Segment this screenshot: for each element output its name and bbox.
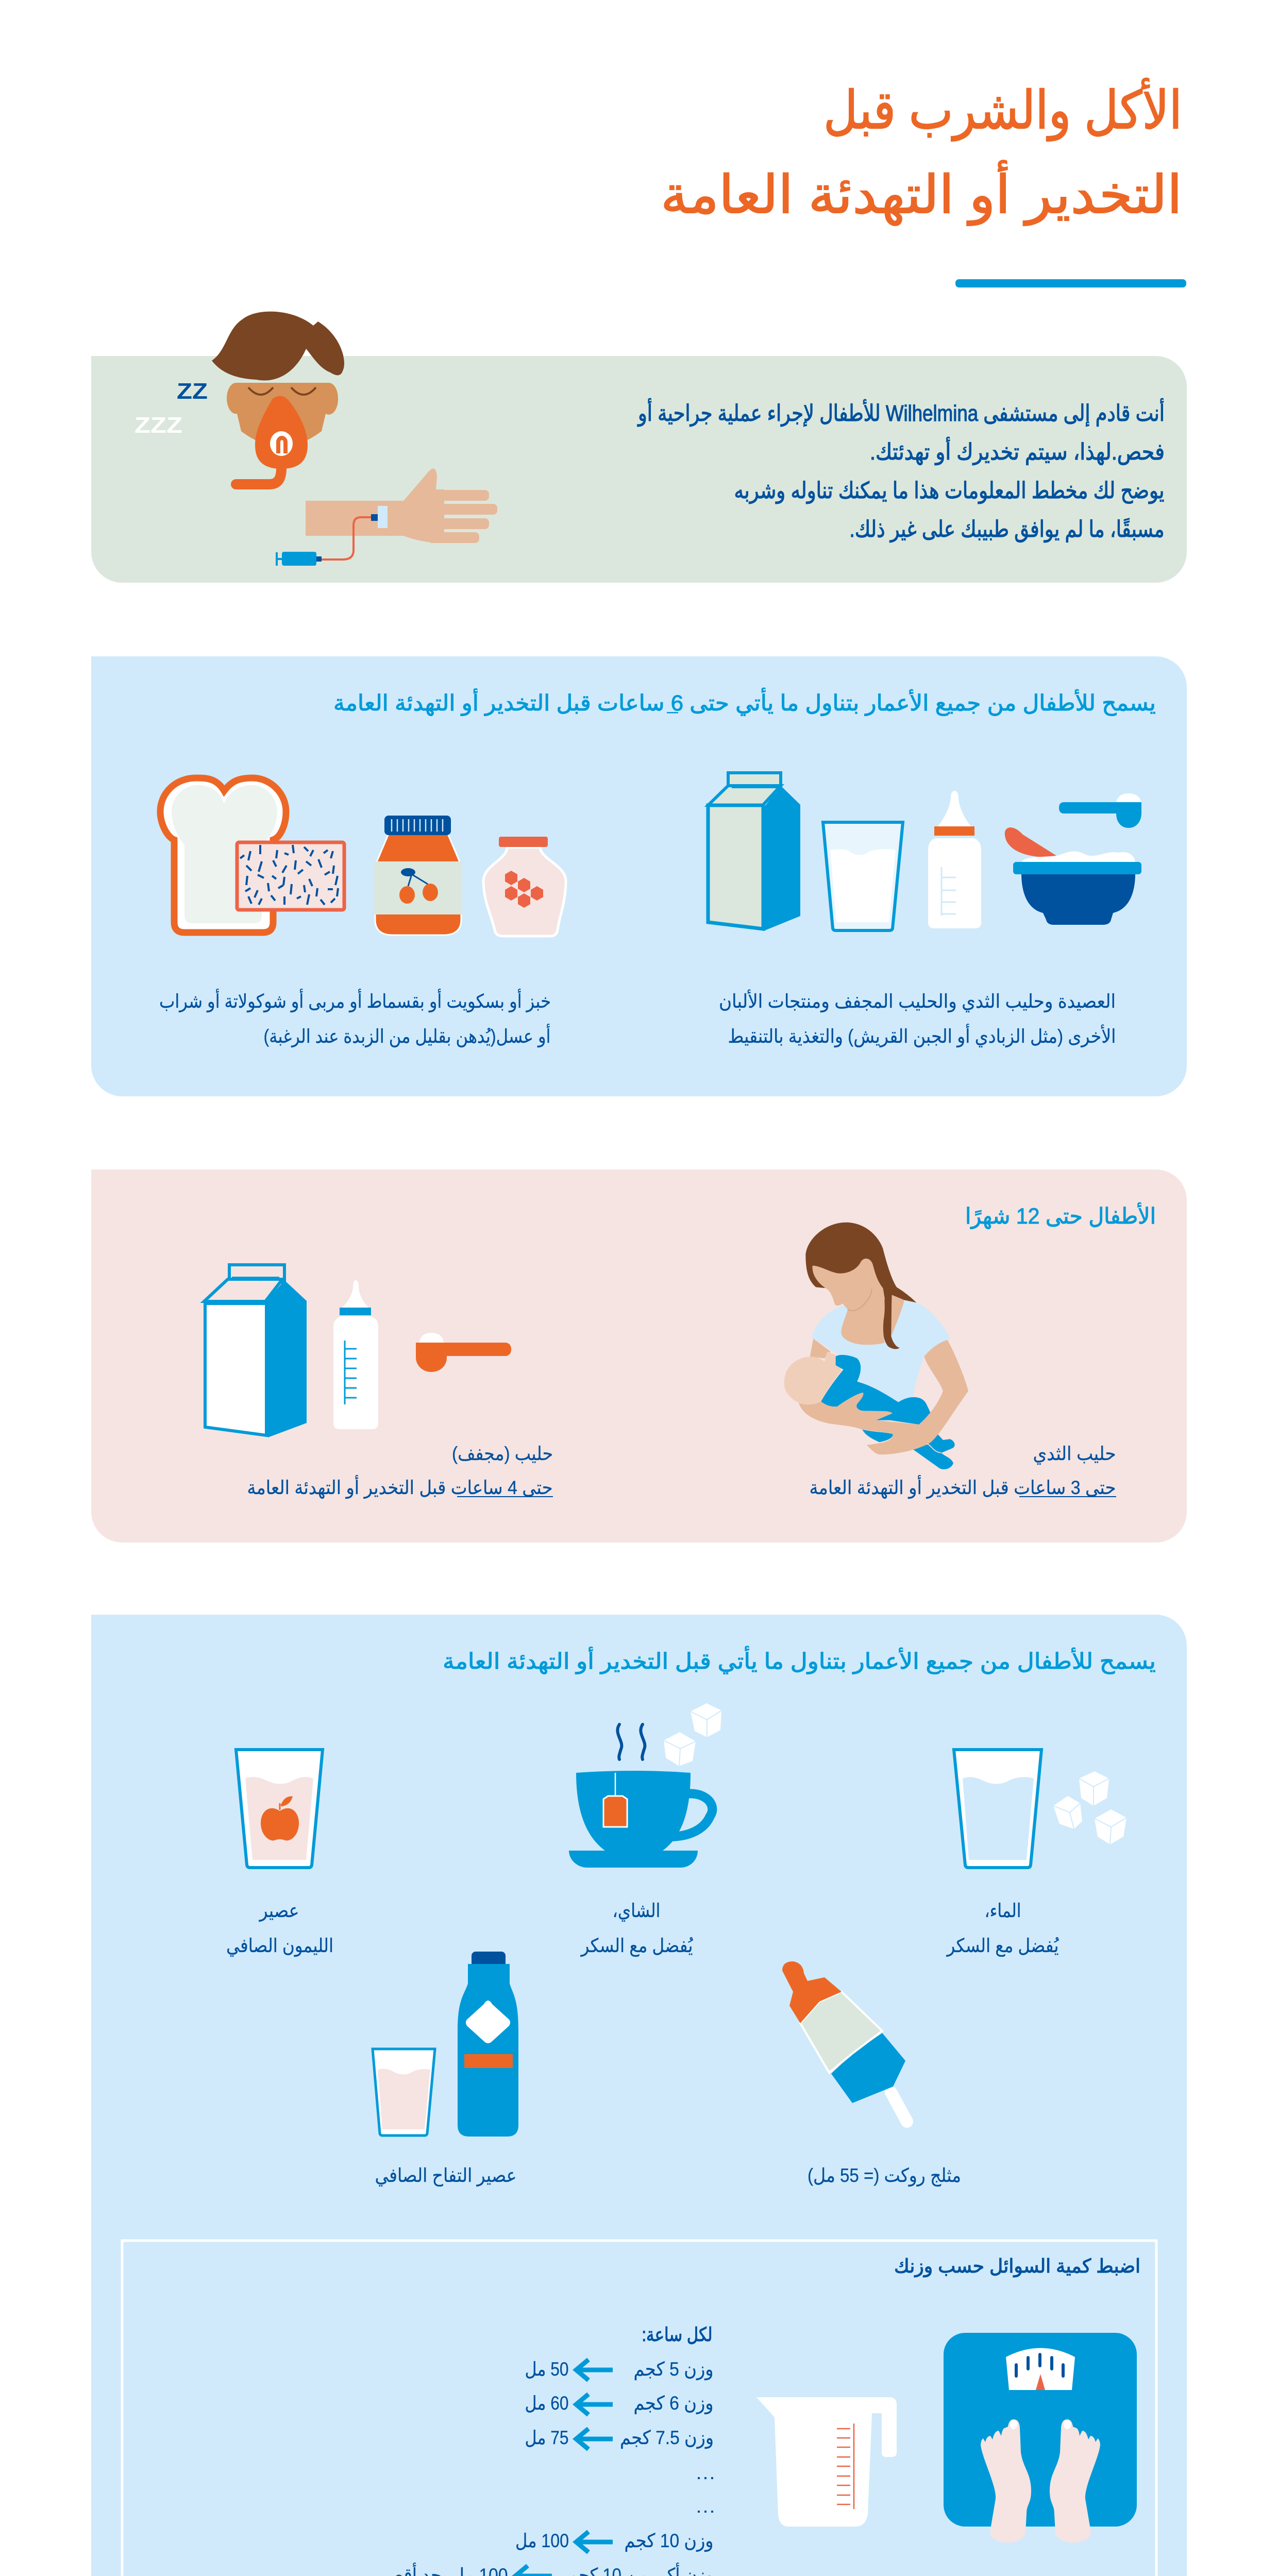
panel heading: يسمح للأطفال من جميع الأعمار بتناول ما يأتي حتى 6 ساعات قبل التخدير أو التهدئة العامة <box>333 687 1156 716</box>
icon: small apple juice glass <box>373 2049 435 2136</box>
label: apple juice: عصير التفاح الصافي <box>375 2165 516 2187</box>
row: 6 kg <box>525 2393 713 2415</box>
icon: bottle <box>458 1952 518 2137</box>
caption: allowed foods right: الأخرى (مثل الزبادي أو الجبن القريش) والتغذية بالتنقيط <box>728 1024 1116 1047</box>
intro text: يوضح لك مخطط المعلومات هذا ما يمكنك تناوله وشربه <box>734 478 1165 504</box>
icon: water glass with sugar <box>954 1750 1126 1868</box>
icon: honey jar <box>483 837 566 936</box>
panel heading: الأطفال حتى 12 شهرًا <box>965 1202 1156 1229</box>
panel background <box>91 1615 1187 2576</box>
caption: allowed foods left: أو عسل(يُدهن بقليل من الزبدة عند الرغبة) <box>264 1024 550 1047</box>
caption: allowed foods right: العصيدة وحليب الثدي والحليب المجفف ومنتجات الألبان <box>719 989 1116 1012</box>
icon: hand with infusion <box>277 468 497 566</box>
icon: breastfeeding mother <box>784 1223 968 1469</box>
box heading: اضبط كمية السوائل حسب وزنك <box>894 2256 1140 2277</box>
icon: baby bottle <box>928 791 981 928</box>
panel: 6 hours before <box>91 656 1187 1096</box>
panel background <box>91 1170 1187 1543</box>
icon: cup of tea <box>569 1703 721 1868</box>
intro panel background <box>91 356 1187 583</box>
label: tea: يُفضل مع السكر <box>580 1935 693 1957</box>
panel heading: يسمح للأطفال من جميع الأعمار بتناول ما يأتي قبل التخدير أو التهدئة العامة <box>443 1646 1156 1674</box>
label: water: يُفضل مع السكر <box>946 1935 1059 1957</box>
title: التخدير أو التهدئة العامة <box>661 160 1182 226</box>
box outline <box>122 2241 1156 2576</box>
icon: biscuit <box>237 842 344 910</box>
caption: breast milk: حتى 3 ساعات قبل التخدير أو التهدئة العامة <box>809 1475 1116 1499</box>
row: 7.5 kg: وزن 7.5 كجم <box>620 2427 714 2449</box>
caption: formula milk: حتى 4 ساعات قبل التخدير أو التهدئة العامة <box>247 1475 552 1499</box>
intro text: أنت قادم إلى مستشفى Wilhelmina للأطفال لإجراء عملية جراحية أو <box>637 398 1165 427</box>
row: 10 kg: وزن 10 كجم <box>625 2530 713 2552</box>
sleep letters <box>134 379 208 438</box>
row: 7.5 kg <box>525 2427 714 2449</box>
icon: jam jar <box>374 816 462 935</box>
row: 10 kg: 100 مل <box>515 2530 569 2551</box>
icon: milk glass <box>823 822 903 930</box>
sleep letters: ZZZ <box>134 413 182 438</box>
row: 6 kg: وزن 6 كجم <box>634 2393 713 2414</box>
panel: children up to 12 months <box>91 1170 1187 1543</box>
label: lemonade: الليمون الصافي <box>226 1935 333 1957</box>
label: lemonade: عصير <box>259 1900 299 1922</box>
panel: clear fluids allowed <box>91 1615 1187 2576</box>
icon: milk carton <box>708 773 800 930</box>
panel background <box>91 656 1187 1096</box>
title: الأكل والشرب قبل <box>823 78 1182 141</box>
label: tea: الشاي، <box>612 1900 661 1922</box>
panel: introduction <box>91 312 1187 583</box>
intro text: مسبقًا، ما لم يوافق طبيبك على غير ذلك. <box>849 517 1165 543</box>
intro text: فحص.لهذا، سيتم تخديرك أو تهدئتك. <box>870 437 1165 465</box>
icon: popsicle <box>782 1961 907 2122</box>
row: more than 10 kg <box>374 2563 713 2576</box>
row: 6 kg: 60 مل <box>525 2393 569 2414</box>
icon: milk carton <box>204 1265 307 1437</box>
row: 5 kg <box>525 2359 713 2380</box>
icon: weighing scale with feet <box>944 2333 1137 2543</box>
icon: porridge bowl <box>1005 793 1141 925</box>
row: 5 kg: وزن 5 كجم <box>634 2359 713 2380</box>
label: water: الماء، <box>984 1900 1021 1921</box>
caption: allowed foods right <box>719 989 1116 1047</box>
ellipsis rows <box>698 2477 713 2513</box>
icon: formula scoop <box>416 1333 511 1372</box>
icon: baby bottle <box>333 1280 378 1429</box>
title <box>661 78 1182 226</box>
caption: breast milk <box>809 1443 1116 1499</box>
row: 7.5 kg: 75 مل <box>525 2427 569 2448</box>
row: 10 kg <box>515 2530 713 2552</box>
caption: formula milk <box>247 1443 553 1499</box>
title rule <box>955 279 1186 287</box>
intro text <box>637 398 1165 543</box>
icon: juice glass with apple <box>236 1750 323 1868</box>
caption: breast milk: حليب الثدي <box>1033 1443 1116 1465</box>
row: 5 kg: 50 مل <box>525 2359 569 2380</box>
label: tea <box>580 1900 693 1957</box>
caption: allowed foods left: خبز أو بسكويت أو بقسماط أو مربى أو شوكولاتة أو شراب <box>159 989 551 1012</box>
label: water <box>946 1900 1059 1957</box>
subheading per hour: لكل ساعة: <box>642 2324 712 2345</box>
sleep letters: ZZ <box>177 379 208 404</box>
icon: sleeping child with mask <box>212 312 344 484</box>
icon: bread <box>160 778 286 933</box>
label: lemonade <box>226 1900 333 1957</box>
caption: formula milk: حليب (مجفف) <box>452 1443 553 1464</box>
label: popsicle: مثلج روكت (= 55 مل) <box>808 2165 961 2187</box>
box: fluids by weight <box>122 2241 1156 2576</box>
caption: allowed foods left <box>159 989 551 1047</box>
icon: measuring jug <box>756 2397 897 2527</box>
